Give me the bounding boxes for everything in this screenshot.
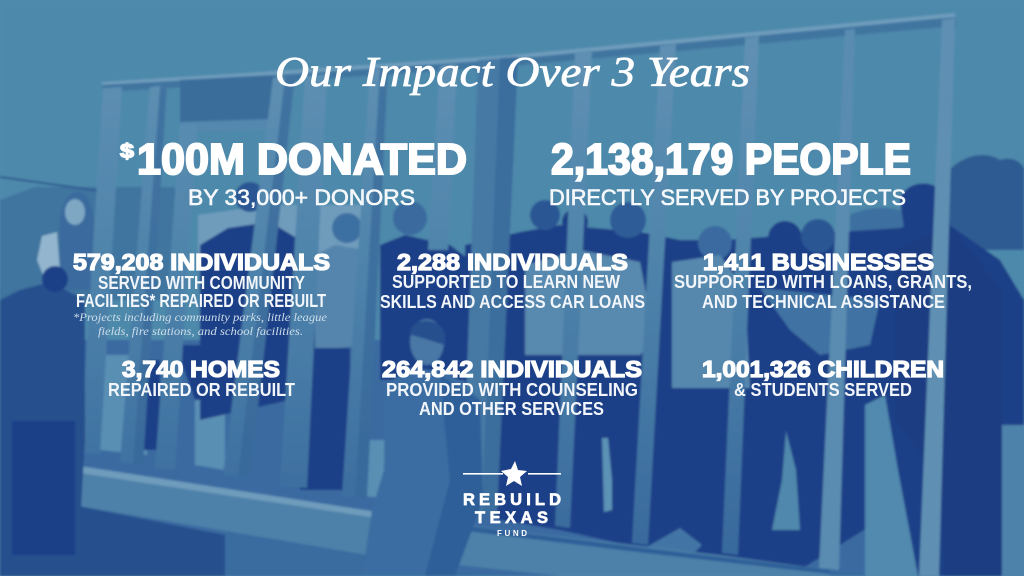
centre left crowd [200,222,350,490]
stat: community facilities: FACILTIES* REPAIRED OR REBUILT [76,291,326,311]
logo: Rebuild Texas Fund: REBUILD [463,491,561,509]
stat: businesses: AND TECHNICAL ASSISTANCE [702,292,945,312]
stat: homes: 3,740 HOMES [122,356,280,382]
stat: homes [108,356,295,400]
stat: counseling: 264,842 INDIVIDUALS [382,356,642,382]
title: Our Impact Over 3 Years [275,50,750,96]
stat: people served: 2,138,179 PEOPLE [551,135,911,184]
stat: children and students [702,356,944,400]
stat: community facilities: *Projects including community parks, little league [73,312,327,324]
stat: businesses: 1,411 BUSINESSES [703,249,934,275]
group of people behind frame [37,182,1024,576]
stat: counseling [382,356,642,419]
stat: $100M donated: $ [120,141,134,163]
stat: skills and car loans: 2,288 INDIVIDUALS [397,249,628,275]
light shirts [525,250,655,355]
plaid man in foreground left [0,266,100,576]
stat: people served [549,135,911,210]
logo: Rebuild Texas Fund: FUND [497,529,527,538]
sole plate boards [73,465,830,576]
stat: children and students: 1,001,326 CHILDREN [702,356,944,382]
stat: skills and car loans [380,249,645,312]
big man in foreground right [895,225,1002,576]
right crowd mass [465,215,1024,576]
background house at left [0,187,175,300]
left woman [60,192,110,290]
stat: people served: DIRECTLY SERVED BY PROJECTS [549,185,906,210]
hoodie man in foreground [362,319,483,576]
stat: counseling: AND OTHER SERVICES [419,399,604,419]
stat: community facilities: 579,208 INDIVIDUALS [73,249,330,275]
stat: $100M donated [120,135,467,210]
stat: homes: REPAIRED OR REBUILT [108,380,295,400]
shoes [645,528,702,552]
logo: Rebuild Texas Fund: TEXAS [475,509,548,527]
stat: community facilities: fields, fire stations, and school facilities. [98,326,303,338]
gaps between legs [602,438,612,512]
stat: community facilities: SERVED WITH COMMUNITY [98,273,305,293]
stat: counseling: PROVIDED WITH COUNSELING [386,380,638,400]
stat: skills and car loans: SUPPORTED TO LEARN NEW [392,272,620,292]
stat: skills and car loans: SKILLS AND ACCESS CAR LOANS [380,292,645,312]
logo: Rebuild Texas Fund [463,461,561,538]
stat: $100M donated: BY 33,000+ DONORS [188,185,415,210]
stat: $100M donated: 100M DONATED [137,135,467,184]
stat: businesses: SUPPORTED WITH LOANS, GRANTS, [674,272,972,292]
deck and ground [0,340,1024,576]
background trees at right [850,155,1024,260]
stat: community facilities [73,249,330,338]
stat: children and students: & STUDENTS SERVED [734,380,912,400]
stat: businesses [674,249,972,312]
stud shading [133,57,518,515]
